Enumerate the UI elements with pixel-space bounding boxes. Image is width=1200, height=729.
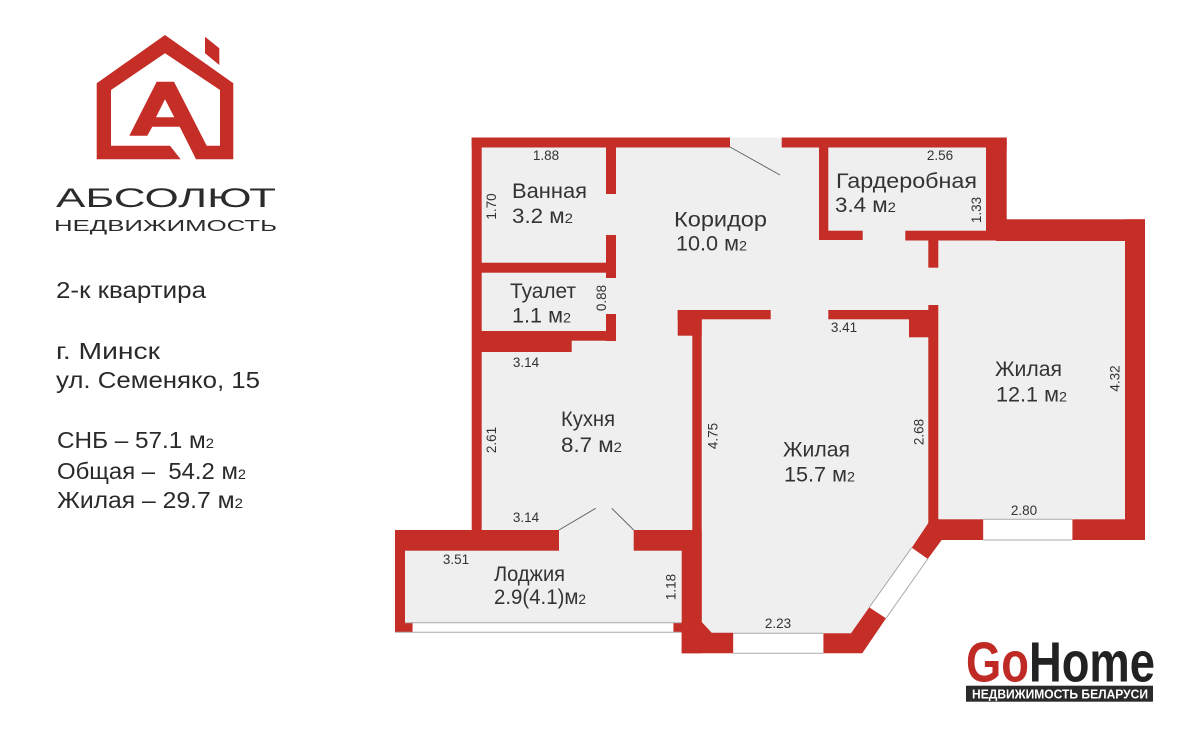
dimensions: 2.23 bbox=[765, 616, 791, 631]
room: toilet: Туалет bbox=[510, 280, 576, 303]
room labels bbox=[494, 170, 1067, 609]
total area: Общая – 54.2 м 2 bbox=[57, 458, 246, 484]
dimensions: 3.51 bbox=[443, 552, 469, 567]
bathroom area: 3.2 м2 bbox=[512, 205, 573, 228]
room: loggia: Лоджия bbox=[494, 563, 565, 586]
entrance door gap bbox=[730, 138, 782, 148]
icon: chimney bbox=[205, 37, 219, 65]
dimensions: 2.68 bbox=[912, 419, 926, 445]
dimensions: 4.75 bbox=[706, 423, 720, 449]
dimensions: 0.88 bbox=[594, 285, 609, 311]
dimensions bbox=[443, 148, 1122, 631]
dimensions: 1.70 bbox=[484, 193, 499, 220]
room: corridor: Коридор bbox=[674, 208, 767, 232]
room: living room small: Жилая bbox=[995, 358, 1062, 381]
GoHome wordmark: GoHome bbox=[966, 630, 1155, 694]
dimensions: 1.18 bbox=[664, 574, 678, 600]
city: г. Минск bbox=[56, 338, 161, 364]
floor area bbox=[400, 143, 1135, 633]
loggia area: 2.9(4.1)м2 bbox=[494, 586, 586, 609]
floor plan bbox=[395, 138, 1145, 653]
logo: Absolut real estate bbox=[54, 35, 277, 235]
dimensions: 1.33 bbox=[969, 197, 984, 223]
apartment type: 2-к квартира bbox=[56, 277, 206, 303]
corridor area: 10.0 м2 bbox=[676, 232, 747, 256]
walls bbox=[395, 138, 1145, 653]
dimensions: 4.32 bbox=[1108, 365, 1122, 392]
logo subtitle: НЕДВИЖИМОСТЬ bbox=[54, 218, 277, 235]
wardrobe area: 3.4 м2 bbox=[835, 194, 896, 217]
dimensions: 2.61 bbox=[484, 427, 499, 453]
text block: apartment info bbox=[56, 277, 260, 513]
kitchen area: 8.7 м2 bbox=[561, 434, 622, 457]
room: bathroom: Ванная bbox=[512, 180, 587, 203]
dimensions: 2.56 bbox=[927, 148, 953, 163]
logo wordmark: АБСОЛЮТ bbox=[56, 183, 276, 213]
door swings bbox=[559, 147, 780, 530]
windows bbox=[395, 519, 1072, 653]
street: ул. Семеняко, 15 bbox=[56, 367, 260, 393]
living room large area: 15.7 м2 bbox=[784, 464, 855, 486]
logo: GoHome bbox=[966, 630, 1155, 702]
dimensions: 3.41 bbox=[831, 320, 857, 335]
SNB area: СНБ – 57.1 м 2 bbox=[57, 427, 214, 453]
dimensions: 3.14 bbox=[513, 510, 540, 525]
room: kitchen: Кухня bbox=[561, 408, 615, 431]
GoHome banner: НЕДВИЖИМОСТЬ БЕЛАРУСИ bbox=[972, 686, 1148, 702]
dimensions: 2.80 bbox=[1011, 503, 1037, 518]
dimensions: 1.88 bbox=[533, 148, 559, 163]
room: wardrobe: Гардеробная bbox=[836, 170, 977, 193]
icon: house with letter A bbox=[97, 35, 233, 159]
toilet area: 1.1 м2 bbox=[512, 304, 571, 328]
living area: Жилая – 29.7 м 2 bbox=[57, 487, 243, 513]
room: living room large: Жилая bbox=[783, 438, 850, 462]
dimensions: 3.14 bbox=[513, 355, 540, 370]
living room small area: 12.1 м2 bbox=[996, 384, 1067, 406]
